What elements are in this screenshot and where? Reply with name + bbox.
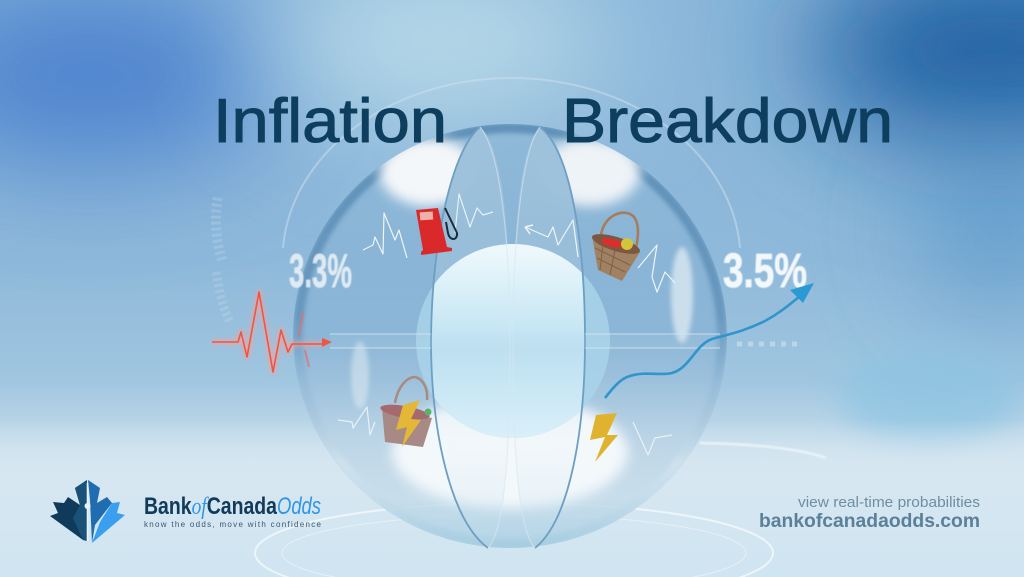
horizontal glass axis <box>330 334 720 348</box>
lens fills <box>431 127 585 548</box>
dotted marker <box>737 342 802 346</box>
logo: wordmark: Odds <box>277 493 321 520</box>
icon: faded basket with lightning bolt <box>379 377 432 447</box>
logo: maple leaf mark <box>50 480 125 543</box>
call to action: view real-time probabilities <box>798 494 980 511</box>
icon: lightning bolt <box>590 413 618 462</box>
title: Breakdown: Breakdown <box>562 87 893 156</box>
heartbeat arrow <box>212 292 332 372</box>
stat: 3.3%: 3.3% <box>289 244 352 297</box>
rising trend arrow <box>605 283 814 398</box>
icon: fuel pump <box>416 208 457 255</box>
left lens disc <box>431 127 510 548</box>
glass sphere <box>293 124 727 548</box>
large gauge arc behind the sphere <box>216 78 740 322</box>
title: Inflation: Inflation <box>213 87 447 156</box>
pulse lines <box>338 194 675 455</box>
right lens disc <box>513 127 585 548</box>
stat: 3.5%: 3.5% <box>723 245 807 298</box>
logo: wordmark: BankofCanada <box>144 493 278 520</box>
icon: basket of produce <box>590 213 642 281</box>
logo: wordmark: know the odds, move with confidence <box>144 520 322 529</box>
logo: wordmark <box>144 493 322 529</box>
call to action: bankofcanadaodds.com <box>759 510 980 532</box>
inner ball <box>416 244 610 438</box>
floor rings <box>255 443 826 577</box>
call to action <box>759 494 980 532</box>
